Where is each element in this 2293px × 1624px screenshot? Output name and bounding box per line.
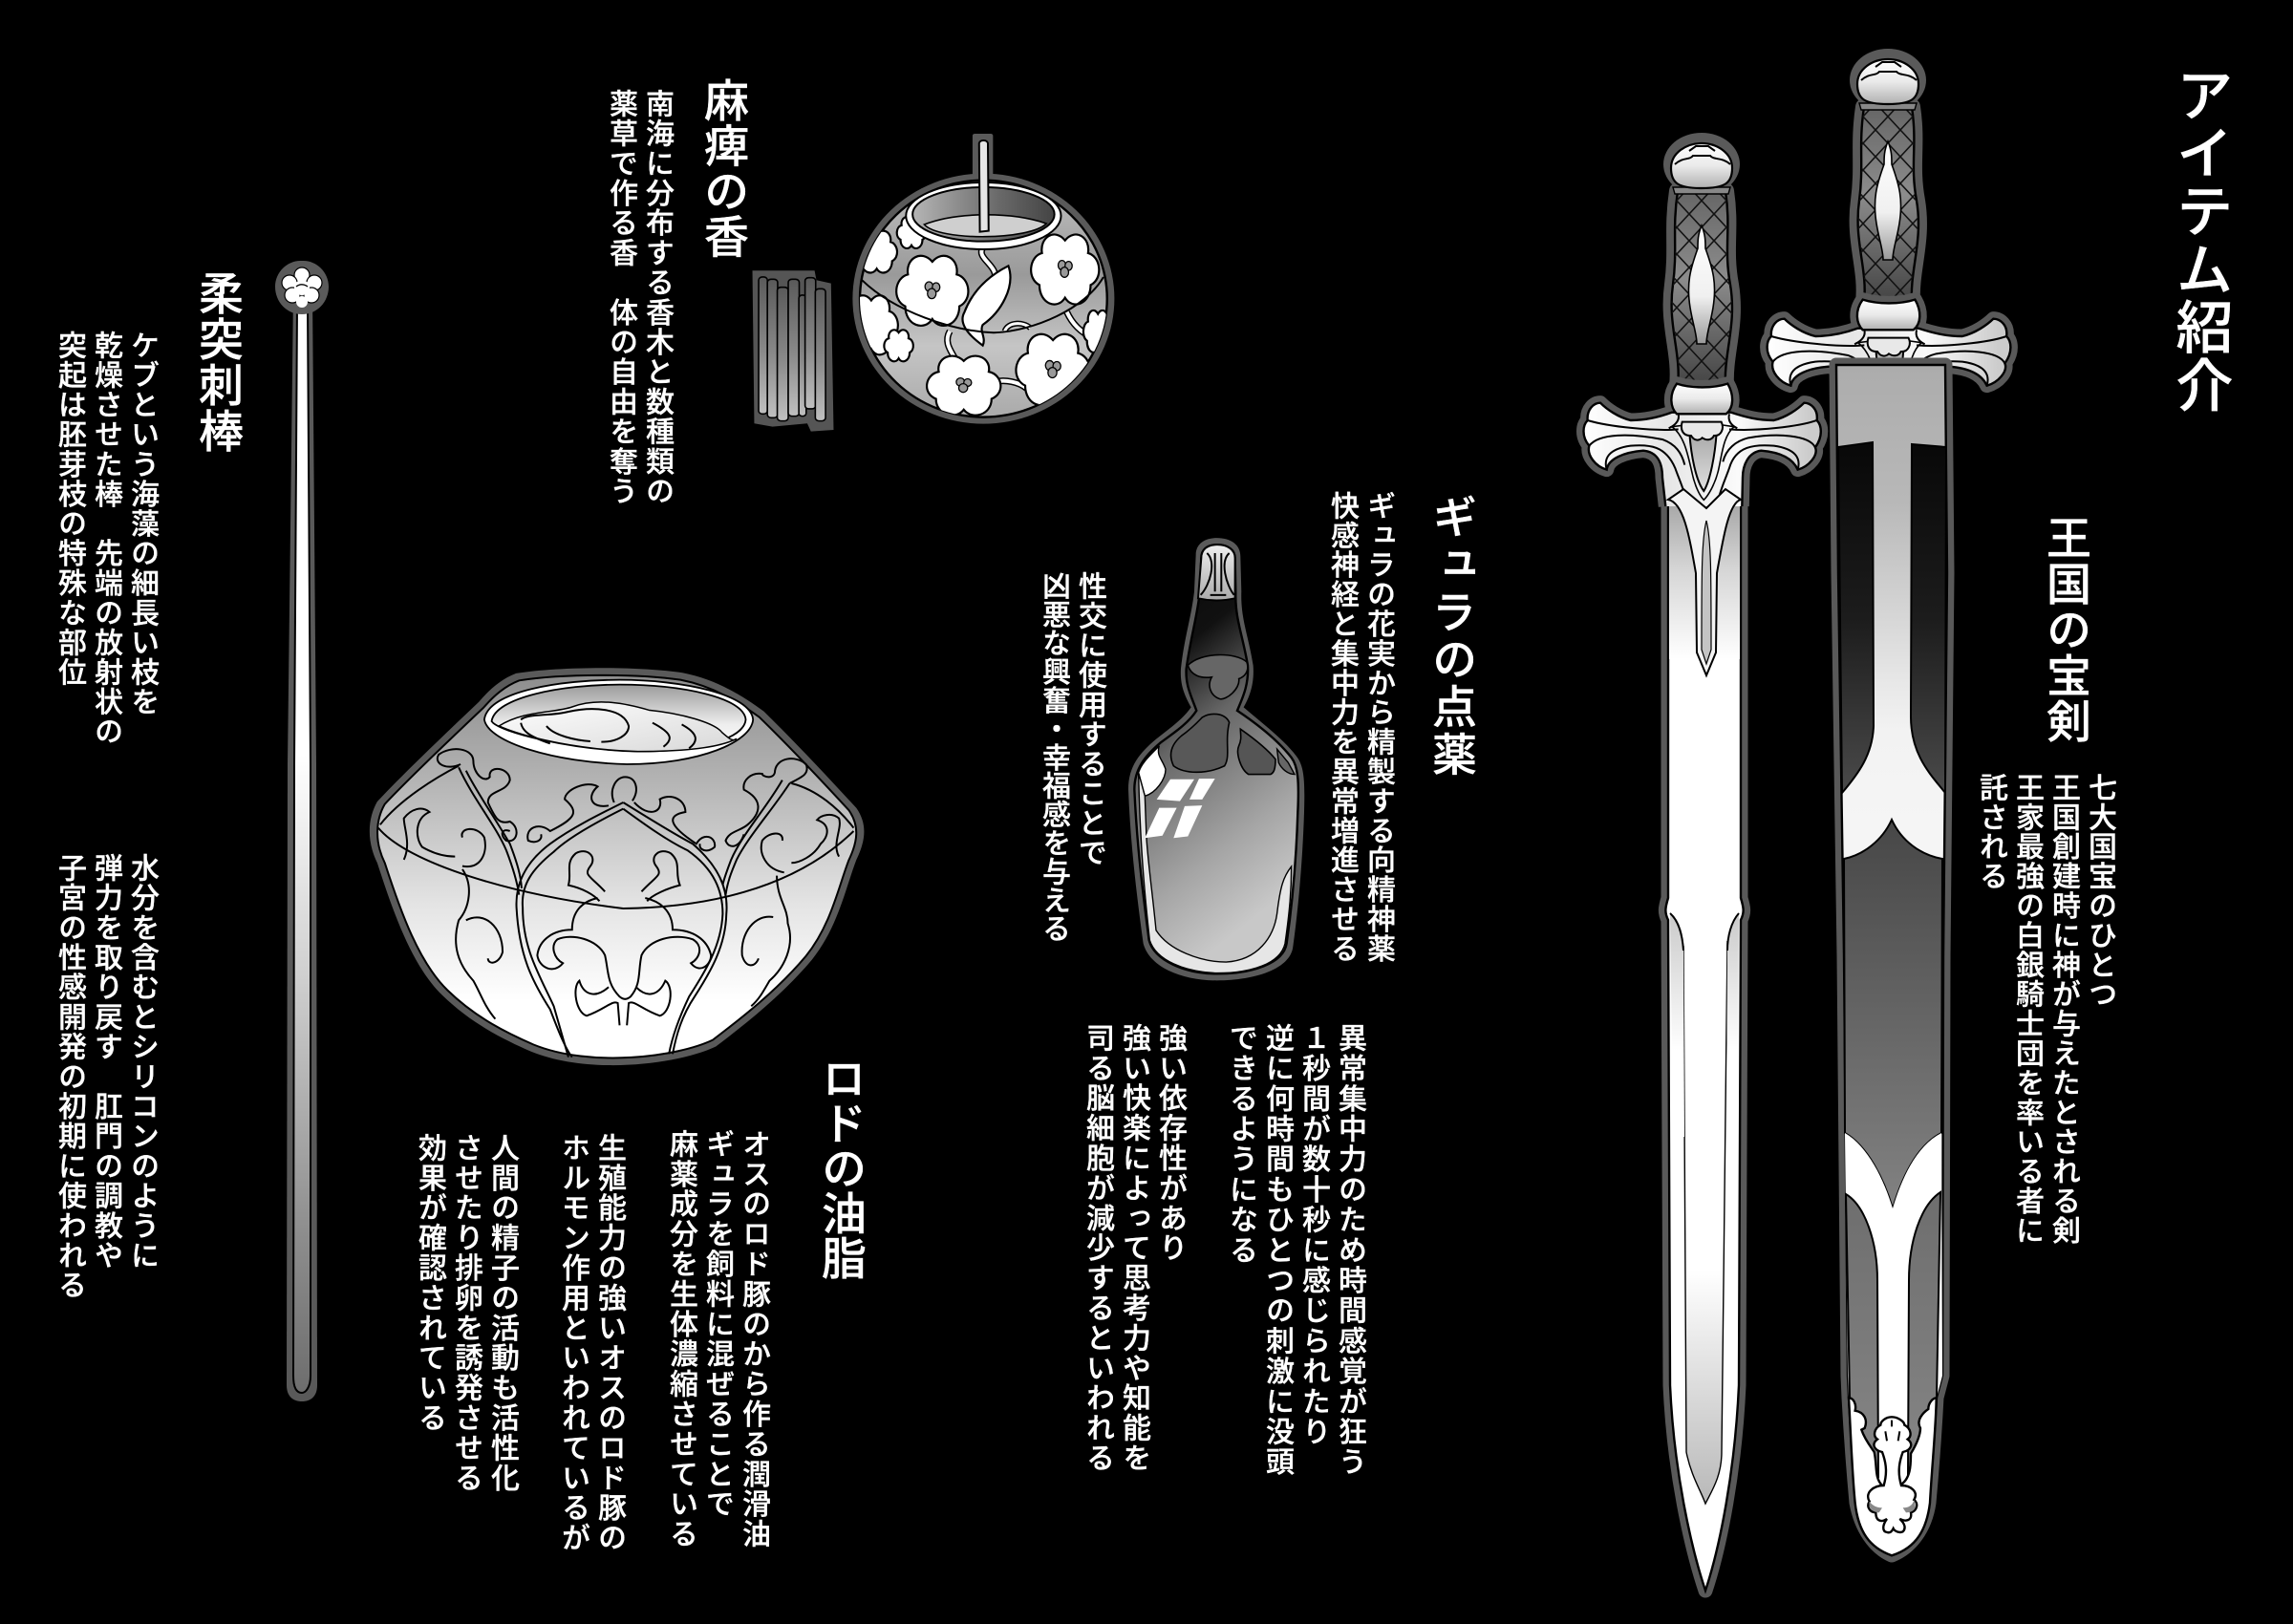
text: gyura hyper focus: できるようになる — [1225, 1023, 1256, 1266]
text: needle rod usage: 子宮の性感開発の初期に使われる — [54, 853, 85, 1300]
text: needle rod material: ケブという海藻の細長い枝を — [126, 331, 158, 716]
bottle reflections — [1139, 654, 1295, 973]
text: gyura dependency: 司る脳細胞が減少するといわれる — [1082, 1023, 1113, 1473]
scabbard hilt — [1850, 49, 1926, 302]
text: gyura use: 凶悪な興奮・幸福感を与える — [1038, 571, 1069, 943]
text: gyura dependency — [1082, 1023, 1188, 1473]
text: needle rod material: 乾燥させた棒 先端の放射状の — [90, 331, 121, 746]
scabbard chape ornament — [1849, 1398, 1937, 1555]
heading: needle rod: 柔突刺棒 — [192, 270, 243, 454]
text: kingdom sword description: 託される — [1975, 773, 2006, 891]
text: gyura description — [1326, 491, 1395, 963]
scabbard body inner line — [1836, 365, 1947, 1555]
text: rod oil hormones: 生殖能力の強いオスのロド豚の — [593, 1133, 625, 1553]
text: gyura use: 性交に使用することで — [1074, 571, 1105, 867]
text: gyura dependency: 強い快楽によって思考力や知能を — [1118, 1023, 1149, 1473]
text: paralysis incense description: 南海に分布する香木と数種類の — [641, 89, 673, 506]
text: rod oil origin: 麻薬成分を生体濃縮させている — [665, 1129, 696, 1549]
text: gyura hyper focus: 異常集中力のため時間感覚が狂う — [1334, 1023, 1365, 1477]
item: scabbarded sword — [1768, 49, 2010, 1555]
sword central ricasso — [1668, 489, 1741, 675]
heading: gyura eye drops: ギュラの点薬 — [1425, 494, 1476, 779]
bottle outline — [1128, 538, 1304, 980]
scabbard middle panel — [1844, 820, 1942, 1208]
scabbard body — [1836, 365, 1947, 1555]
bottle stopper — [1198, 545, 1235, 600]
burner wick outline — [973, 134, 993, 191]
scabbard white lower fork — [1845, 1133, 1942, 1553]
text: rod oil effects: 人間の精子の活動も活性化 — [486, 1133, 518, 1493]
text: rod oil origin: ギュラを飼料に混ぜることで — [701, 1129, 733, 1519]
text: rod oil origin — [665, 1129, 771, 1549]
scabbard dark upper panels — [1838, 442, 1946, 793]
jar ornament — [378, 749, 853, 1058]
heading: kingdom sword: 王国の宝剣 — [2040, 515, 2090, 744]
item: oil jar — [370, 668, 864, 1065]
text: rod oil hormones — [557, 1133, 627, 1553]
item: kingdom sword — [1583, 133, 1821, 1591]
sword grip and pommel — [1663, 133, 1740, 386]
item: incense sticks — [753, 270, 833, 432]
text: rod oil effects: させたり排卵を誘発させる — [450, 1133, 482, 1493]
burner wick — [979, 140, 989, 232]
text: rod oil hormones: ホルモン作用といわれているが — [557, 1133, 589, 1553]
heading: rod oil: ロドの油脂 — [815, 1056, 866, 1280]
text: kingdom sword description — [1975, 773, 2117, 1245]
text: kingdom sword description: 王国創建時に神が与えたとされる剣 — [2047, 773, 2079, 1245]
text: gyura hyper focus: １秒間が数十秒に感じられたり — [1297, 1023, 1329, 1447]
text: needle rod material: 突起は胚芽枝の特殊な部位 — [54, 331, 85, 687]
text: needle rod usage — [54, 853, 160, 1300]
text: rod oil effects: 効果が確認されている — [414, 1133, 445, 1433]
sword blade — [1665, 468, 1744, 1591]
text: paralysis incense description — [605, 89, 675, 506]
heading: paralysis incense: 麻痺の香 — [697, 77, 748, 259]
text: needle rod material — [54, 331, 160, 746]
jar outer outline — [370, 668, 864, 1065]
text: gyura dependency: 強い依存性があり — [1154, 1023, 1186, 1263]
sword guard — [1583, 384, 1821, 506]
burner mouth — [906, 182, 1061, 249]
text: kingdom sword description: 王家最強の白銀騎士団を率いる者に — [2011, 773, 2043, 1245]
jar mouth and oil — [484, 680, 753, 764]
jar body — [377, 675, 856, 1058]
text: gyura description: ギュラの花実から精製する向精神薬 — [1362, 491, 1394, 963]
item: incense burner — [845, 134, 1114, 424]
text: kingdom sword description: 七大国宝のひとつ — [2084, 773, 2115, 1009]
text: needle rod usage: 弾力を取り戻す 肛門の調教や — [90, 853, 121, 1271]
rod shaft — [287, 291, 317, 1401]
text: paralysis incense description: 薬草で作る香 体の自由を奪う — [605, 89, 636, 506]
text: gyura hyper focus: 逆に何時間もひとつの刺激に没頭 — [1261, 1023, 1293, 1477]
scabbard lower side panels — [1846, 1192, 1940, 1477]
item: needle rod — [275, 261, 329, 1401]
burner body — [845, 174, 1114, 424]
title: アイテム紹介 — [2168, 66, 2232, 414]
text: gyura description: 快感神経と集中力を異常増進させる — [1326, 491, 1358, 963]
text: gyura use — [1038, 571, 1107, 943]
bottle glass — [1134, 545, 1298, 973]
scabbard guard — [1768, 300, 2010, 422]
text: gyura hyper focus — [1225, 1023, 1366, 1477]
text: rod oil effects — [414, 1133, 520, 1493]
text: rod oil origin: オスのロド豚のから作る潤滑油 — [738, 1129, 769, 1549]
rod radial tip — [275, 261, 329, 314]
item: eye-drop bottle — [1128, 538, 1304, 980]
text: needle rod usage: 水分を含むとシリコンのように — [126, 853, 158, 1271]
